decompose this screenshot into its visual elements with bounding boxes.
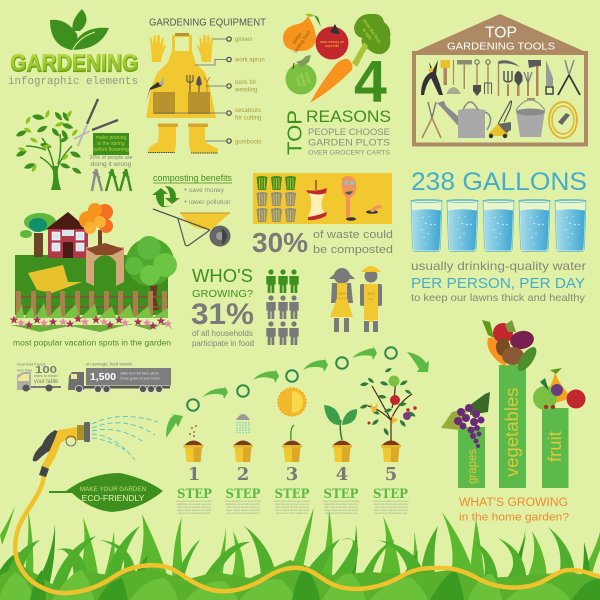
icons: bottom row tools <box>422 98 577 138</box>
panel: compost <box>252 173 393 258</box>
bullets: save money <box>189 187 225 194</box>
heading: WHO'S <box>192 266 253 286</box>
step 4: wisi enim ad minim veniam quis <box>325 513 358 515</box>
panel: 238 gallons <box>411 168 587 304</box>
step 2: Lorem ipsum dolor sit amet consect <box>225 500 261 503</box>
text: local food <box>17 362 59 385</box>
icon: wheelbarrow <box>153 209 230 246</box>
icons: top row tools <box>421 60 580 96</box>
panel: top reasons: PEOPLE CHOOSE <box>308 127 390 138</box>
heading: gardening equipment: GARDENING EQUIPMENT <box>149 16 267 28</box>
icon: pear <box>283 14 321 54</box>
text: 30%: 30% <box>252 227 308 258</box>
step 5: 5 <box>385 464 397 485</box>
grass under fence <box>15 303 168 318</box>
callout box: make pruning <box>93 133 129 155</box>
illustration: garden scene <box>10 203 177 348</box>
number 4: 4 <box>354 49 387 115</box>
step 4: Lorem ipsum dolor sit amet consect <box>323 500 359 503</box>
icon: broccoli: is safe <box>362 27 373 41</box>
labels: for cutting <box>235 116 261 122</box>
step 1: nibh euismod tincidunt ut laoreet <box>177 506 211 509</box>
icon: tree <box>15 109 83 190</box>
step 3 <box>274 388 310 515</box>
step 2: 2 <box>237 464 249 485</box>
labels: weeding <box>234 88 257 94</box>
text: local food: miles to reach <box>34 374 58 378</box>
icon: fence <box>15 291 168 317</box>
text: local food: local food travels <box>17 362 46 366</box>
step 4: nibh euismod tincidunt ut laoreet <box>324 506 358 509</box>
icon: gumboots <box>148 124 218 153</box>
step 2: STEP <box>226 487 261 502</box>
labels: work apron <box>234 58 265 64</box>
icon: glasses <box>411 200 586 252</box>
text: to keep: to keep our lawns thick and healthy <box>411 292 586 304</box>
icon: tomato: save money on <box>320 40 344 44</box>
icon: grapes <box>441 392 490 448</box>
caption: WHAT'S GROWING <box>459 497 568 509</box>
text: long truck: 1,500 <box>90 372 116 383</box>
step 4: STEP <box>324 487 359 502</box>
panel: who's growing <box>191 266 382 348</box>
panel: top reasons: OVER GROCERY CARTS <box>308 150 391 156</box>
step 4: adipiscing elit sed diam nonummy <box>324 503 359 506</box>
title: GARDENING <box>10 50 138 78</box>
base clumps <box>0 560 600 600</box>
icon: pear: better <box>291 31 304 46</box>
step 1 <box>176 425 212 515</box>
step 2: wisi enim ad minim veniam quis <box>227 513 260 515</box>
icon: hose gun <box>32 416 158 477</box>
icon: long truck <box>68 368 171 392</box>
arrows and rings <box>166 345 429 438</box>
heading: gardening tools: GARDENING TOOLS <box>447 40 555 52</box>
panel: what's growing chart <box>441 320 586 524</box>
icon: orange tree <box>79 203 113 255</box>
step 5: Lorem ipsum dolor sit amet consect <box>373 500 409 503</box>
icon: broccoli: know the food <box>362 18 382 44</box>
text: of waste: of waste could <box>313 229 393 241</box>
caption: in the home garden? <box>459 512 569 524</box>
labels: secateurs <box>235 108 261 114</box>
icon: tomato <box>316 24 348 60</box>
step 1: 1 <box>188 464 200 485</box>
icons: farmers <box>329 266 382 332</box>
step 1: adipiscing elit sed diam nonummy <box>177 503 212 506</box>
step 2: dolore magna aliquam erat volutp <box>226 509 261 512</box>
icons: farmers: men <box>368 297 374 301</box>
step 3: wisi enim ad minim veniam quis <box>276 513 309 515</box>
bullets: lower pollution <box>189 199 231 206</box>
step 1: STEP <box>177 487 212 502</box>
step 5: STEP <box>373 487 408 502</box>
text: of waste: be composted <box>313 244 393 256</box>
icon: apple: quality <box>298 72 308 88</box>
leaf banner: eco-friendly <box>49 473 163 512</box>
icon: broccoli <box>352 14 390 67</box>
panel: top reasons <box>283 14 391 156</box>
callout box: make pruning: make pruning <box>96 135 126 141</box>
icon: worm <box>342 176 382 221</box>
labels: gumboots <box>235 140 261 146</box>
panel: steps <box>166 345 429 515</box>
heading: composting benefits <box>153 173 232 183</box>
step 1: wisi enim ad minim veniam quis <box>178 513 211 515</box>
icon: gazebo <box>86 243 124 286</box>
logo: leaves <box>50 9 109 52</box>
text: long truck: miles from the farm where <box>120 372 159 376</box>
text: long truck <box>86 362 160 383</box>
callout lines <box>155 37 231 143</box>
text: of waste <box>313 229 393 256</box>
text: reasons: REASONS <box>306 107 391 126</box>
panel: trucks <box>17 362 171 392</box>
icon: fruit <box>533 368 586 410</box>
bar labels: grapes <box>467 449 479 484</box>
text: local food: 100 <box>35 365 58 376</box>
panel: top reasons: GARDEN PLOTS <box>308 138 390 148</box>
labels: gloves <box>235 37 252 43</box>
step 3: adipiscing elit sed diam nonummy <box>275 503 310 506</box>
panel: pruning <box>15 99 133 191</box>
icon: apron <box>146 33 216 118</box>
leaf banner: eco-friendly: ECO-FRIENDLY <box>82 493 145 503</box>
caption <box>459 497 569 524</box>
heading: 238 GALLONS <box>411 168 587 196</box>
callout box: make pruning: in the spring <box>97 141 125 147</box>
icon: local truck <box>17 372 61 392</box>
step 3: nibh euismod tincidunt ut laoreet <box>275 506 309 509</box>
icon: shears <box>74 99 118 146</box>
text: local food: less than <box>17 368 32 372</box>
icons: bins <box>256 176 296 222</box>
icon: small tree <box>20 213 56 257</box>
icons: farmers: 54% <box>338 291 346 296</box>
labels <box>234 37 265 146</box>
heading: top: TOP <box>485 24 517 42</box>
icon: flowers <box>10 314 172 332</box>
icon: apple: better <box>303 71 313 85</box>
step 5: adipiscing elit sed diam nonummy <box>374 503 409 506</box>
icon: apple core <box>306 180 327 220</box>
step 4 <box>323 405 359 515</box>
arching blades <box>8 525 575 590</box>
step 2: nibh euismod tincidunt ut laoreet <box>226 506 260 509</box>
icon: swing bench <box>28 265 82 293</box>
panel: composting benefits <box>152 173 232 246</box>
text: usually: usually drinking-quality water <box>411 259 586 273</box>
icons: farmers: women <box>338 297 347 300</box>
panel: top gardening tools shed <box>412 14 588 144</box>
step 5: nibh euismod tincidunt ut laoreet <box>374 506 408 509</box>
text: 30% of people: doing it wrong <box>91 161 132 168</box>
step 5: dolore magna aliquam erat volutp <box>374 509 409 512</box>
icon: carrot <box>310 59 352 103</box>
text: 30% of people: 30% of people are <box>90 155 133 161</box>
step 3: dolore magna aliquam erat volutp <box>275 509 310 512</box>
step 5 <box>359 367 417 515</box>
tall thin blades <box>0 506 600 590</box>
icon: pear: tasting food <box>293 30 313 54</box>
panel: gardening equipment <box>146 16 267 153</box>
subtitle: infographic elements <box>8 76 138 88</box>
rotated TOP: TOP <box>284 110 306 155</box>
text: of all households <box>192 329 253 338</box>
icon: apple: food <box>294 76 303 87</box>
text: long truck: on average, food travels <box>86 362 132 366</box>
bar labels: vegetables <box>501 388 522 477</box>
stat: 31% <box>191 298 254 331</box>
callout box: make pruning: before flowering <box>93 147 129 153</box>
step 3: Lorem ipsum dolor sit amet consect <box>274 500 310 503</box>
illustration: grass <box>0 506 600 600</box>
bullets <box>184 187 231 206</box>
icon: vegetables <box>482 320 540 374</box>
bar labels: fruit <box>544 431 565 462</box>
text: 30% of people <box>90 155 133 168</box>
text: local food: your table <box>34 379 59 385</box>
panel: who's growing: GROWING? <box>192 288 253 300</box>
step 4: 4 <box>336 464 348 485</box>
darker thin blades <box>0 524 590 590</box>
icon: big tree <box>125 236 177 310</box>
text: participate in food <box>192 339 254 348</box>
step 3: 3 <box>286 464 298 485</box>
step 2: adipiscing elit sed diam nonummy <box>226 503 261 506</box>
step 2 <box>225 414 261 515</box>
spray <box>92 416 158 460</box>
icon: three pruners <box>92 169 131 191</box>
labels: tools for <box>235 80 256 86</box>
step 5: wisi enim ad minim veniam quis <box>375 513 408 515</box>
bars <box>458 365 568 488</box>
step 1: Lorem ipsum dolor sit amet consect <box>176 500 212 503</box>
icon: house <box>46 212 88 258</box>
step 3: STEP <box>274 487 310 502</box>
icon: tomato: food bills <box>325 44 339 48</box>
step 4: dolore magna aliquam erat volutp <box>324 509 359 512</box>
bar labels <box>467 388 565 484</box>
icons: people <box>266 269 299 345</box>
icon: recycle arrows <box>152 186 180 207</box>
leaf banner: eco-friendly: MAKE YOUR GARDEN <box>80 486 147 493</box>
caption: most popular vacation spots in the garden <box>13 338 171 348</box>
illustration: hose line <box>15 476 600 593</box>
text: long truck: it was grown to your home <box>120 376 160 380</box>
title: GARDENING <box>10 50 138 76</box>
step 1: dolore magna aliquam erat volutp <box>177 509 212 512</box>
icons: farmers: 46% <box>367 291 375 296</box>
icon: gloves <box>150 35 214 62</box>
icon: apple <box>286 55 316 94</box>
text <box>192 329 254 348</box>
text: per person: PER PERSON, PER DAY <box>411 276 585 292</box>
